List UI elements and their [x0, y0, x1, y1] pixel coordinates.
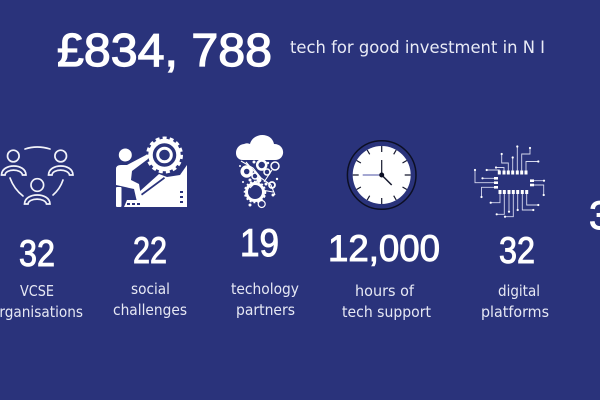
number: 19: [240, 222, 279, 265]
panel: technology partners: [231, 135, 299, 319]
title: investment amount: £834, 788: [57, 24, 272, 76]
icon: three connected people: [2, 147, 73, 204]
panel: digital platforms: platforms: [481, 303, 549, 321]
label: hours of: [355, 282, 415, 300]
number: 32: [19, 233, 55, 274]
label: techology: [231, 280, 299, 298]
panel: hours of tech support: tech support: [342, 303, 431, 321]
panel: social challenges: [113, 138, 187, 319]
panel: hours of tech support: [328, 141, 440, 321]
icon: person pushing gear up slope: [116, 138, 187, 207]
panel: digital platforms: [474, 145, 549, 321]
panel: social challenges: challenges: [113, 301, 187, 319]
number: 22: [133, 230, 167, 271]
label: VCSE: [20, 282, 54, 300]
number: 32: [499, 230, 535, 271]
panel: VCSE organisations: [0, 147, 83, 321]
icon: cloud raining gears: [236, 135, 283, 208]
icon: microchip circuit: [474, 145, 545, 218]
icon: clock: [347, 141, 416, 209]
label: digital: [498, 282, 540, 300]
number: 12,000: [328, 228, 440, 269]
panel: technology partners: partners: [236, 301, 295, 319]
label: social: [131, 280, 170, 298]
subtitle: tech for good investment in N I: [290, 38, 545, 58]
